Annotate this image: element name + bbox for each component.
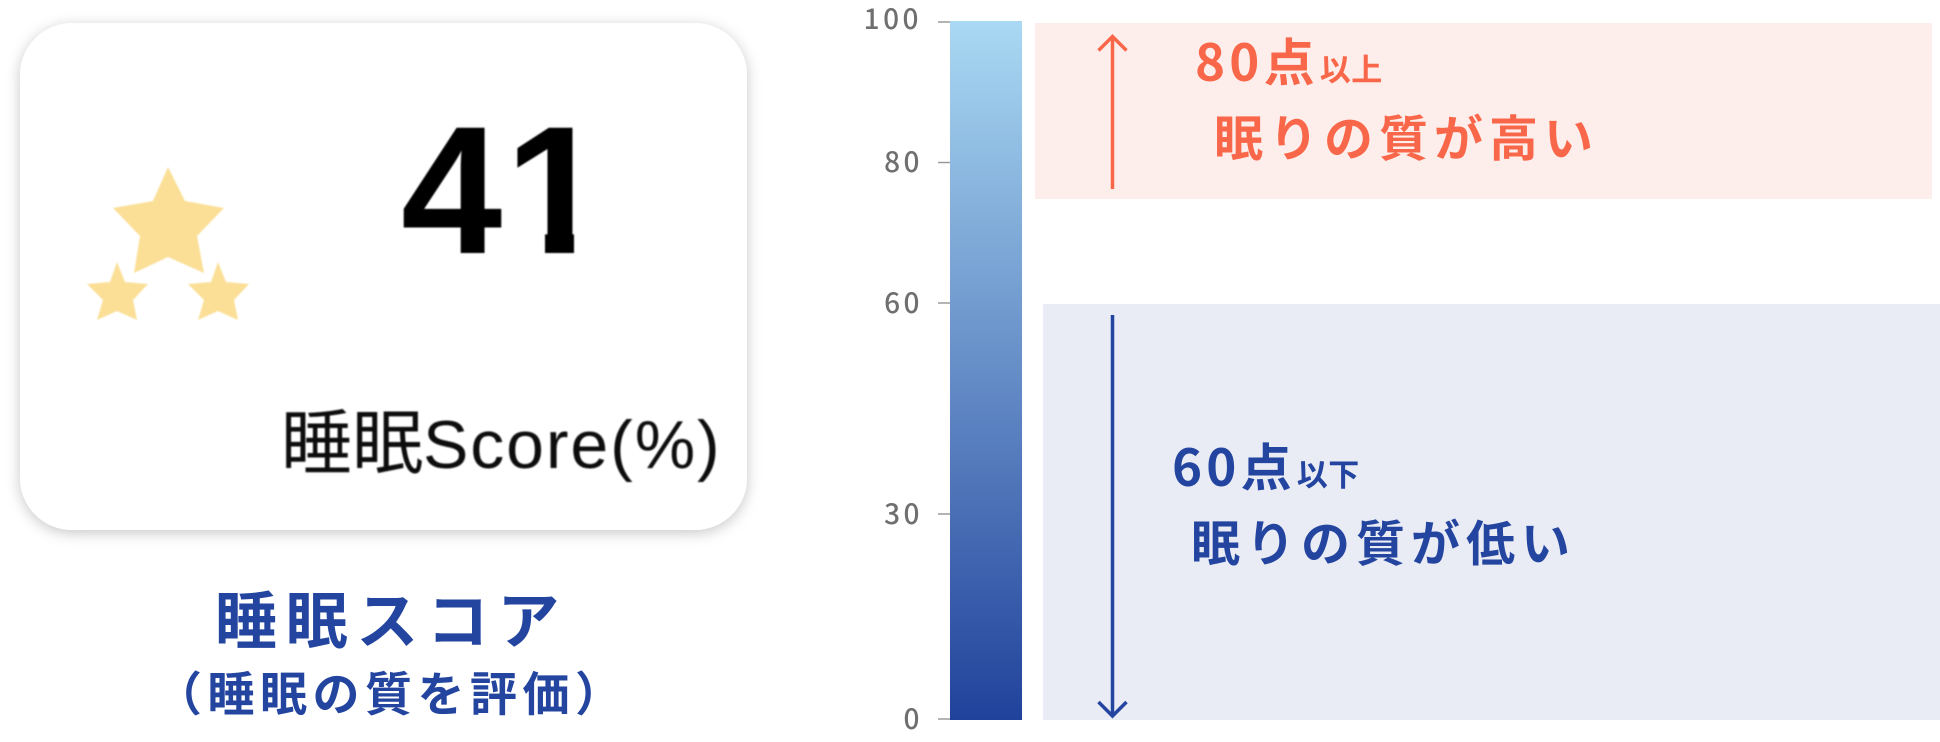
panel: low quality band [1043, 304, 1940, 720]
score label: 睡眠Score(%) [281, 405, 722, 484]
score value [402, 126, 576, 254]
scale axis with ticks: 30 [884, 493, 923, 533]
subheading: evaluates sleep quality: （睡眠の質を評価） [155, 656, 628, 725]
gradient scale bar [950, 21, 1022, 720]
panel: score card [20, 23, 747, 530]
icon: three stars [87, 167, 249, 320]
score value: 4 [401, 88, 502, 292]
heading: sleep score: 睡眠スコア [215, 571, 568, 661]
text: high sleep quality: 眠りの質が高い [1214, 100, 1599, 171]
scale axis with ticks: 80 [884, 141, 923, 181]
text: low sleep quality: 眠りの質が低い [1191, 505, 1576, 576]
scale axis with ticks: 0 [904, 698, 923, 738]
text: 80 points or above: 80点以上 [1195, 22, 1383, 96]
arrow: up [1098, 36, 1126, 189]
text: 60 points or below: 60点以下 [1172, 427, 1360, 501]
scale axis with ticks [864, 0, 950, 738]
arrow: down [1098, 315, 1126, 716]
card background [20, 23, 747, 530]
score value: 1 [505, 88, 606, 292]
panel: high quality band [1035, 23, 1932, 199]
scale axis with ticks: 60 [884, 282, 923, 322]
